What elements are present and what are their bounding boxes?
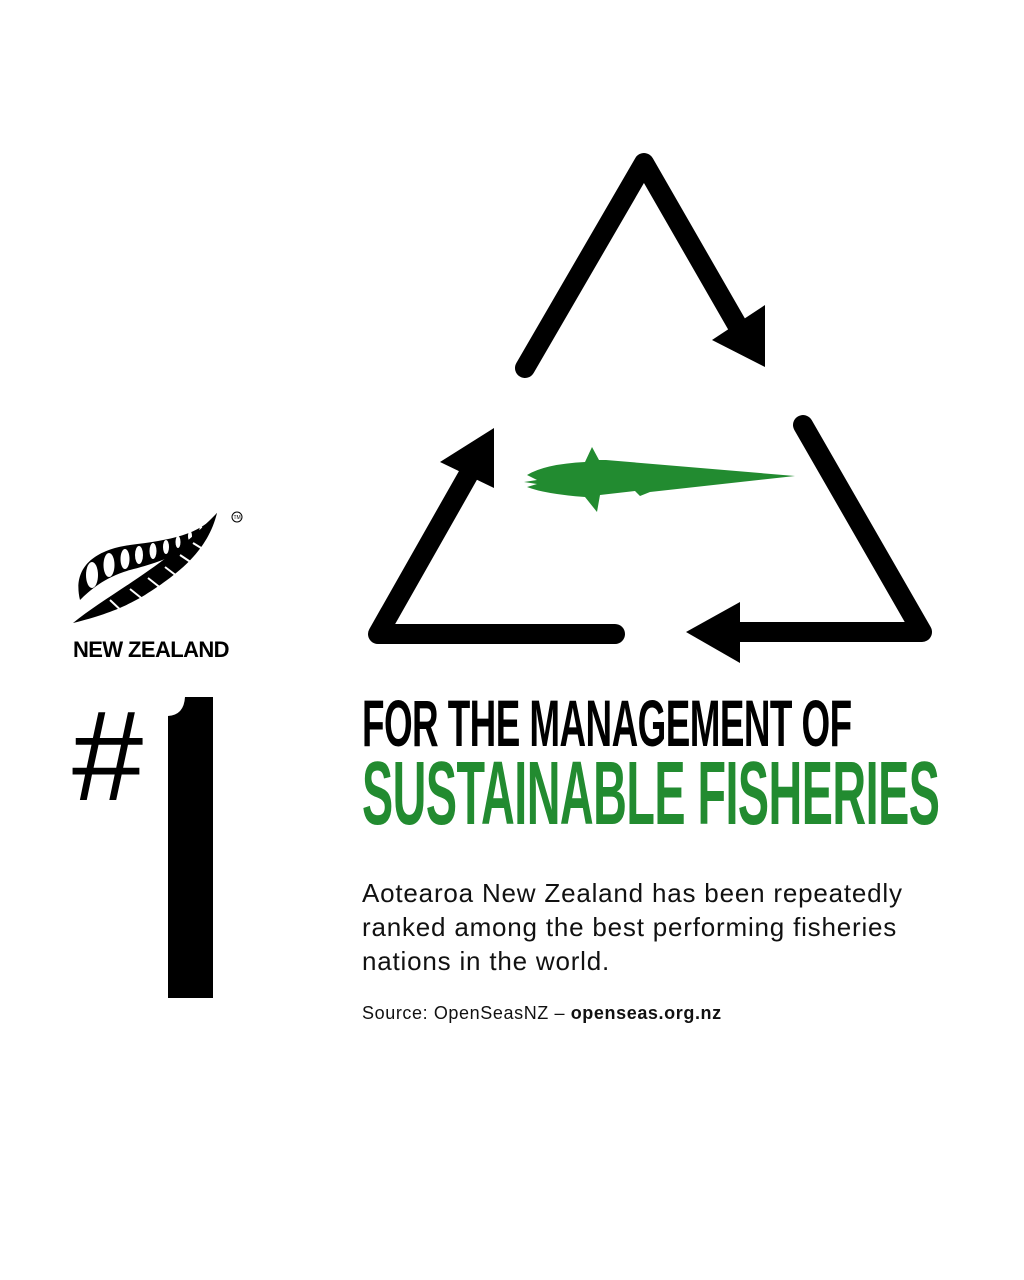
headline: SUSTAINABLE FISHERIES	[362, 744, 939, 844]
source: Source: OpenSeasNZ – openseas.org.nz	[362, 1003, 722, 1023]
logo: New Zealand fern: NEW ZEALAND	[73, 637, 229, 662]
logo: New Zealand fern: TM	[234, 515, 241, 521]
headline	[362, 686, 939, 844]
icon: green fish	[524, 447, 795, 512]
headline: FOR THE MANAGEMENT OF	[362, 686, 852, 760]
body text	[362, 878, 903, 976]
body text: Aotearoa New Zealand has been repeatedly	[362, 878, 903, 908]
arrow: left	[378, 428, 615, 634]
arrow: right	[686, 425, 922, 663]
logo: New Zealand fern	[73, 512, 242, 662]
arrow: top	[525, 163, 765, 368]
big number #1	[72, 685, 213, 998]
big number #1: #	[72, 685, 143, 828]
body text: ranked among the best performing fisheries	[362, 912, 897, 942]
body text: nations in the world.	[362, 946, 610, 976]
